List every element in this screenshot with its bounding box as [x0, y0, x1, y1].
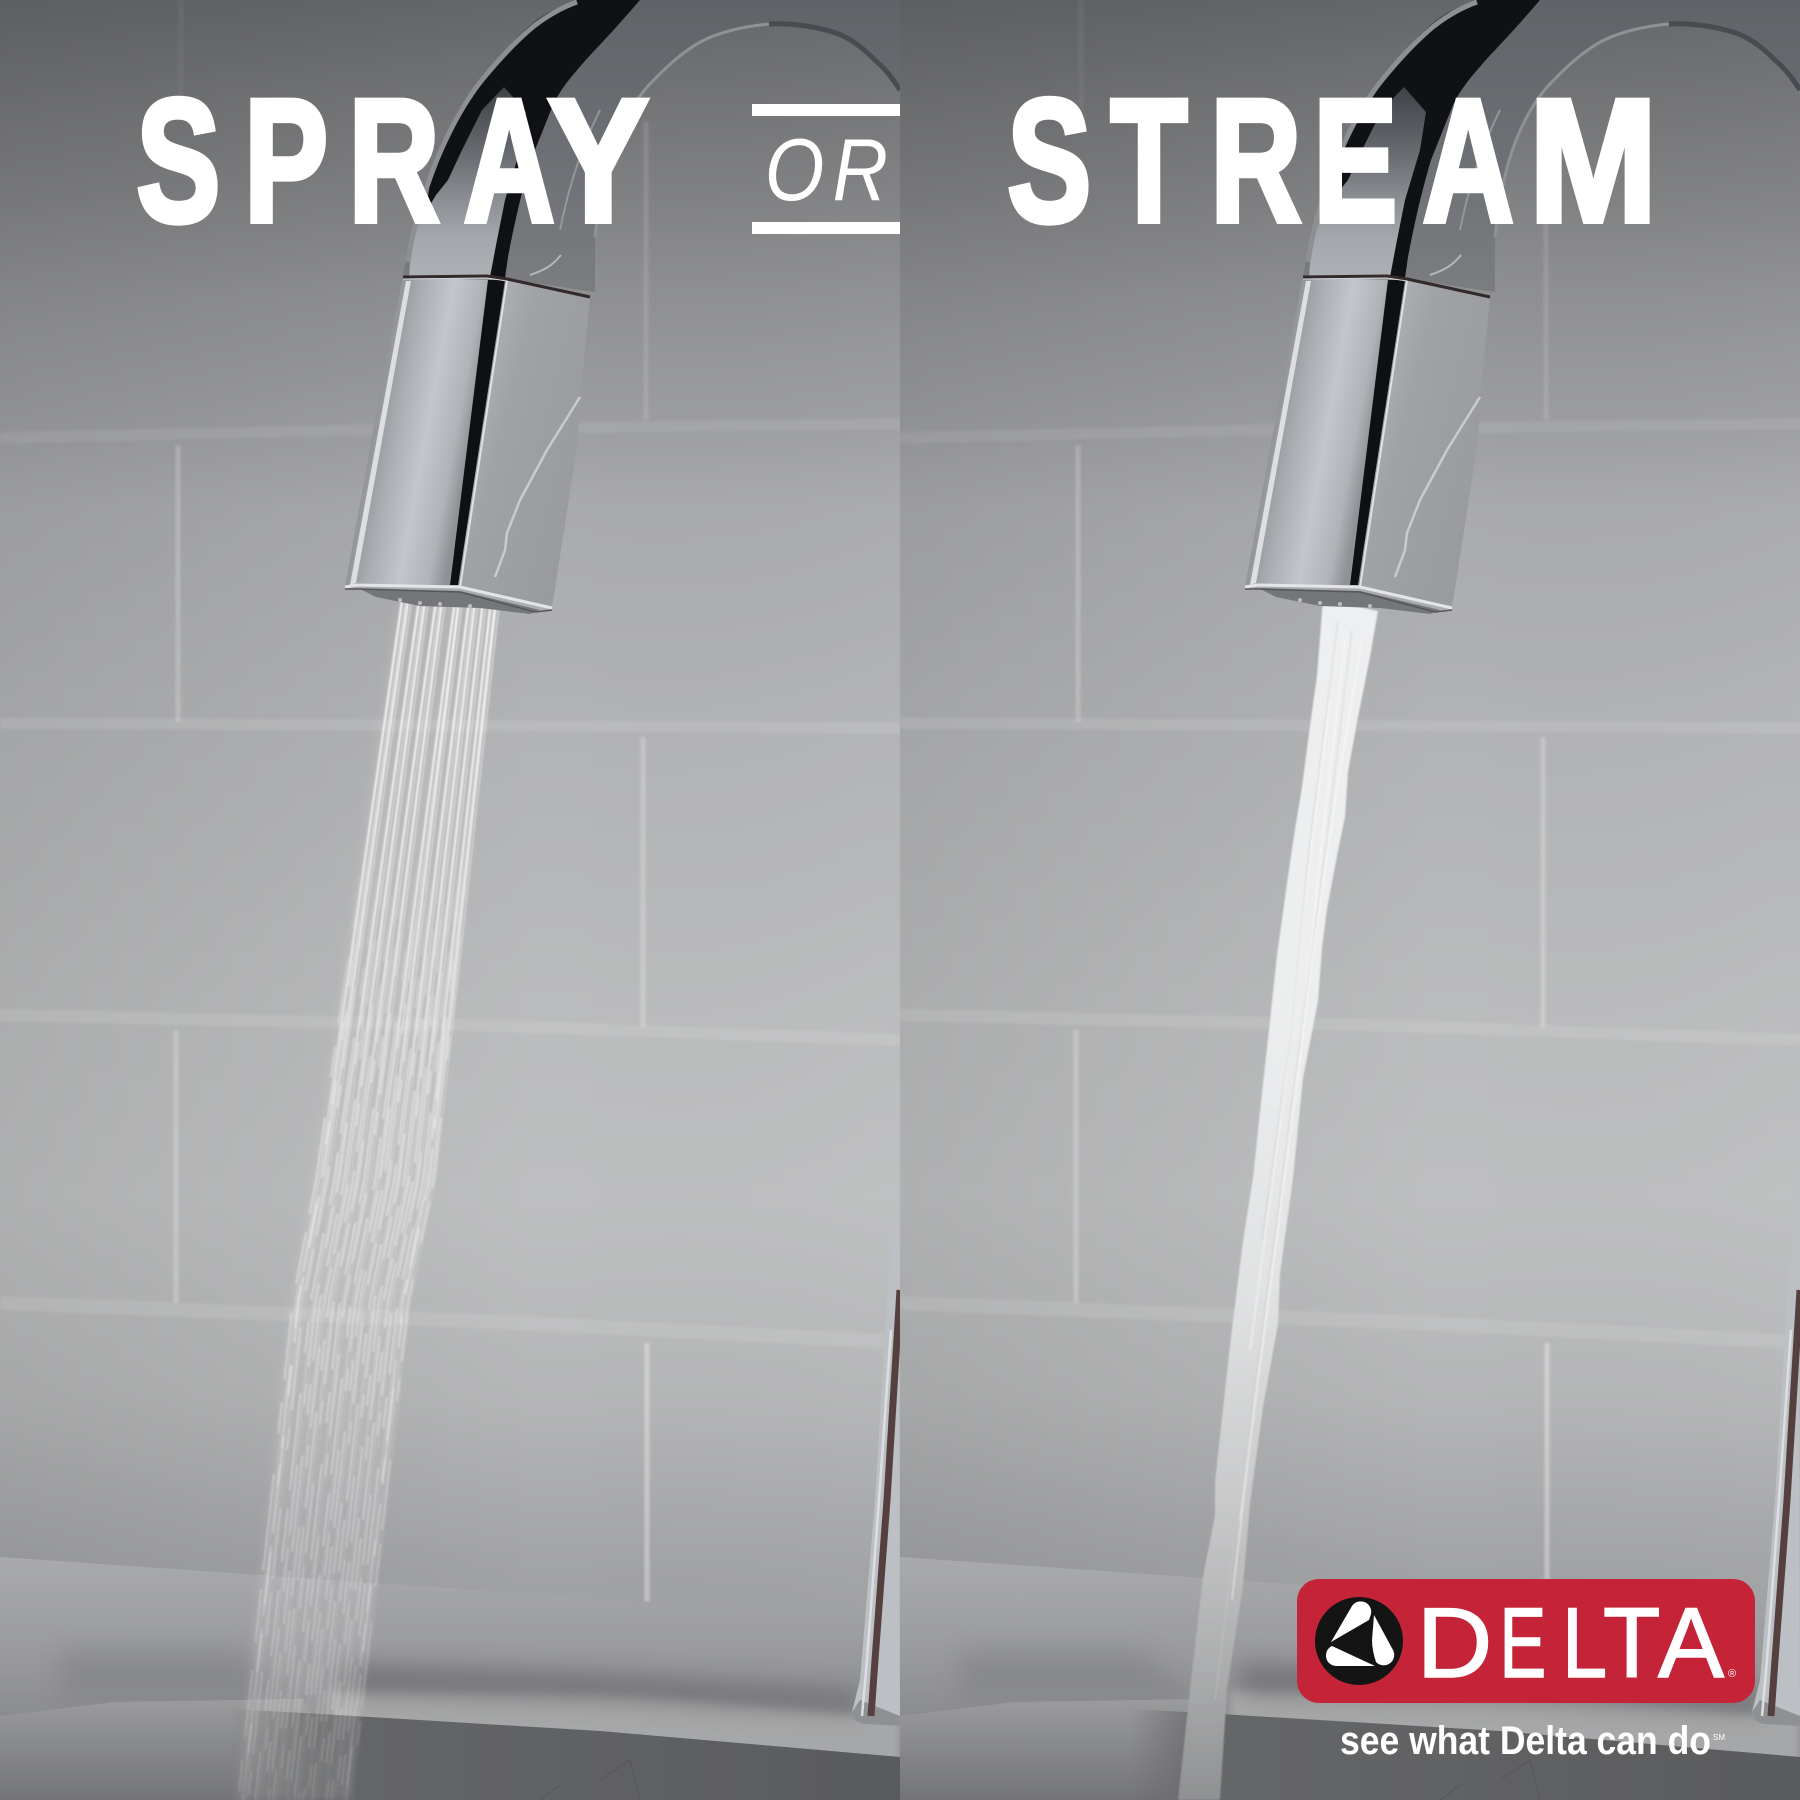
wordmark: DELTA: ® — [1728, 1668, 1736, 1680]
logo: Delta — [1297, 1579, 1755, 1703]
panel: stream — [900, 0, 1800, 1800]
water: spray jets — [235, 601, 500, 1800]
title: SPRAY: Y — [548, 62, 648, 259]
tagline: see what Delta can do — [1340, 1719, 1711, 1763]
wordmark: DELTA — [1417, 1587, 1736, 1699]
wordmark: DELTA: E — [1499, 1588, 1546, 1699]
wordmark: DELTA: L — [1562, 1588, 1607, 1699]
wordmark: DELTA: D — [1417, 1588, 1492, 1698]
background: tiled wall and counter — [0, 0, 900, 1800]
wordmark: DELTA: T — [1603, 1589, 1660, 1699]
tagline: SM — [1713, 1733, 1725, 1742]
divider: OR — [752, 104, 900, 234]
title: STREAM: STREA — [1007, 64, 1514, 259]
faucet: chrome spout and spray head — [345, 0, 900, 614]
background: tiled wall and counter — [900, 0, 1800, 1800]
water: solid stream — [1178, 599, 1378, 1800]
divider: OR: OR — [765, 121, 888, 219]
title: SPRAY: SPRA — [136, 64, 555, 259]
panel: spray — [0, 0, 900, 1800]
title: STREAM: M — [1529, 63, 1657, 258]
wordmark: DELTA: A — [1658, 1587, 1724, 1698]
icon: Delta triangle mark — [1315, 1597, 1403, 1685]
faucet: chrome spout and stream head — [1245, 0, 1800, 614]
